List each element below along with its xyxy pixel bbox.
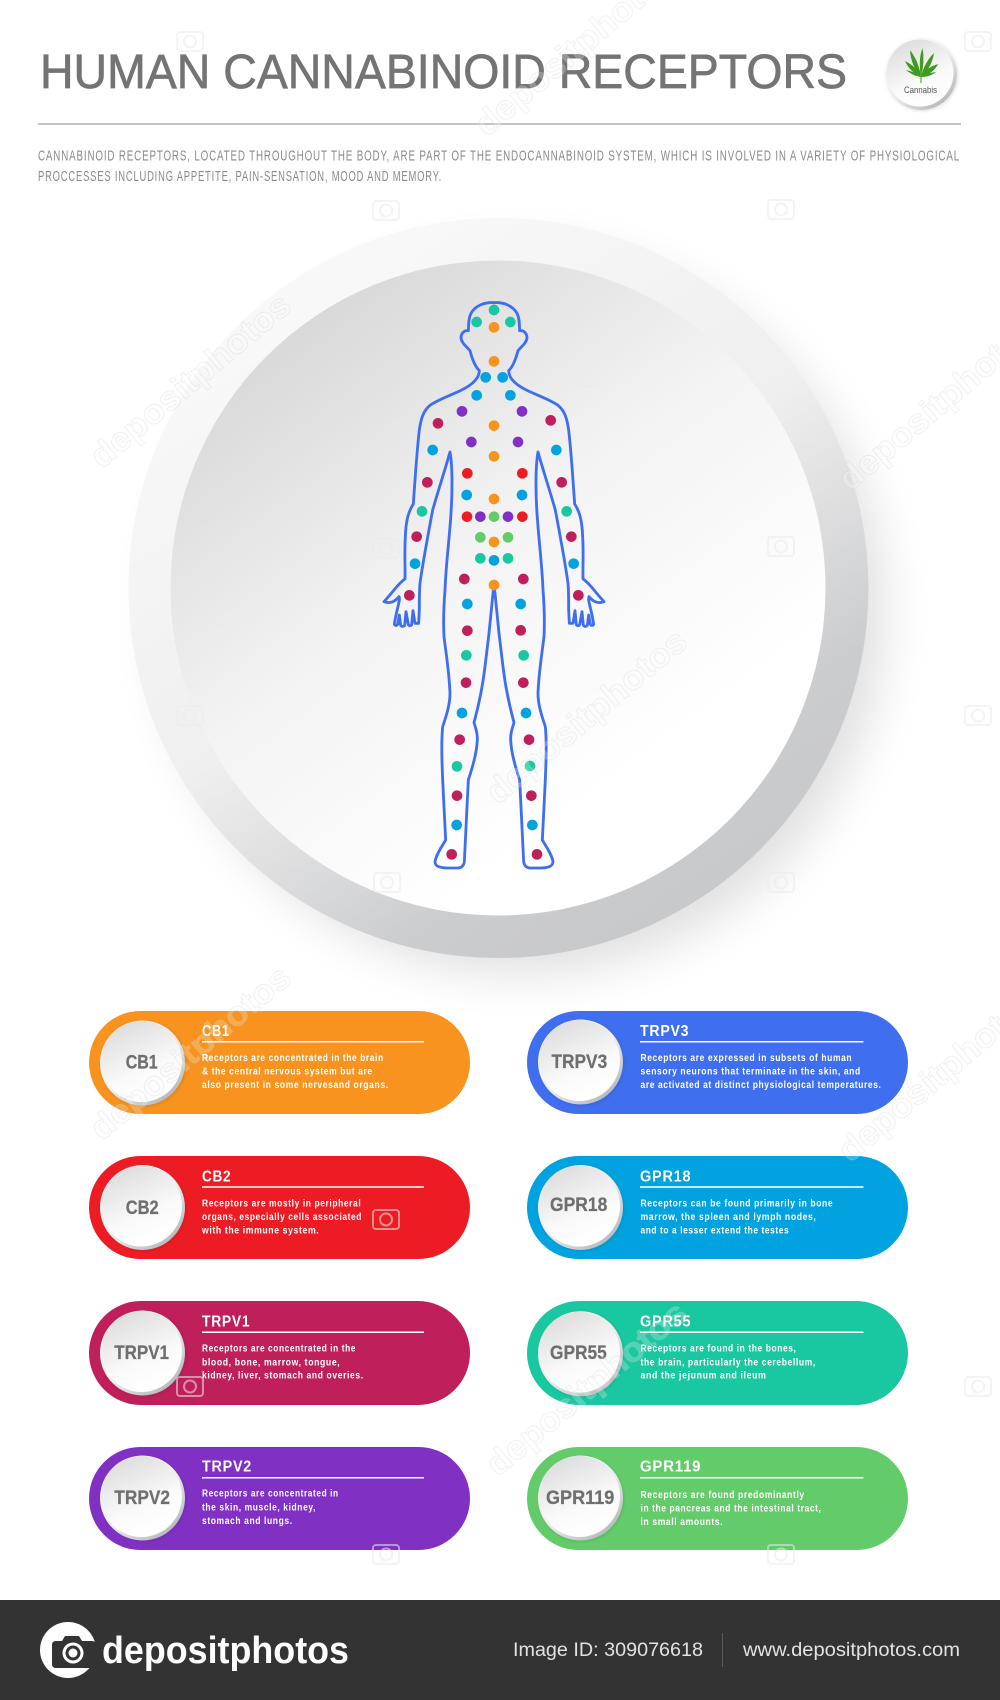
- GPR18 badge: GPR18: [550, 1195, 607, 1216]
- CB1 description: [202, 1053, 389, 1091]
- TRPV2 badge: TRPV2: [114, 1488, 170, 1509]
- CB2 heading: CB2: [202, 1169, 231, 1186]
- image id: Image ID: 309076618: [513, 1640, 703, 1661]
- icon: cannabis leaf: [905, 48, 938, 83]
- CB1 badge: [100, 1020, 185, 1106]
- TRPV2 heading: TRPV2: [202, 1459, 252, 1476]
- TRPV2 description: Receptors are concentrated in: [202, 1489, 339, 1500]
- TRPV1 badge: TRPV1: [114, 1343, 169, 1364]
- CB1 heading: CB1: [202, 1023, 230, 1040]
- GPR18 description: and to a lesser extend the testes: [640, 1226, 789, 1237]
- receptor dots: GPR119: [475, 511, 513, 543]
- GPR55 badge: GPR55: [550, 1343, 607, 1364]
- text: depositphotos: [83, 958, 299, 1148]
- GPR55 description: Receptors are found in the bones,: [640, 1344, 796, 1355]
- inner disc: [170, 260, 826, 916]
- icon: depositphotos camera logo: [40, 1622, 96, 1678]
- GPR119 description: in the pancreas and the intestinal tract,: [640, 1504, 822, 1515]
- receptor dots: CB1: [489, 322, 499, 590]
- GPR18 badge: [538, 1165, 623, 1250]
- GPR18 heading: GPR18: [640, 1169, 691, 1186]
- receptor dots: TRPV2: [457, 406, 527, 522]
- intro text: [38, 148, 960, 185]
- receptor dots: CB2: [462, 468, 528, 522]
- TRPV1 description: kidney, liver, stomach and overies.: [202, 1371, 364, 1382]
- receptor dots: GPR18: [410, 372, 579, 830]
- TRPV3 badge: TRPV3: [552, 1052, 607, 1073]
- GPR119 description: Receptors are found predominantly: [640, 1490, 805, 1501]
- text: depositphotos: [479, 1294, 695, 1484]
- TRPV1 badge: [100, 1310, 185, 1396]
- badge label: Cannabis: [904, 85, 937, 96]
- receptor dots: TRPV1: [404, 415, 584, 860]
- body outline: [384, 303, 604, 868]
- TRPV2 badge: [100, 1456, 185, 1540]
- footer bar: [0, 1600, 1000, 1700]
- intro text: PROCCESSES INCLUDING APPETITE, PAIN-SENSATION, MOOD AND MEMORY.: [38, 168, 442, 185]
- icon: cannabis badge: [885, 38, 957, 110]
- GPR119 badge: [538, 1456, 623, 1540]
- TRPV3 heading: TRPV3: [640, 1023, 689, 1040]
- receptor dots: GPR55: [417, 305, 572, 772]
- TRPV3 description: are activated at distinct physiological temperatures.: [640, 1080, 882, 1091]
- TRPV3 badge: [538, 1020, 623, 1104]
- body diagram: [384, 303, 604, 868]
- TRPV2 description: the skin, muscle, kidney,: [202, 1502, 316, 1513]
- TRPV2 description: stomach and lungs.: [202, 1516, 293, 1527]
- CB2 description: [201, 1199, 362, 1237]
- card: TRPV2: [89, 1447, 470, 1550]
- CB2 description: Receptors are mostly in peripheral: [202, 1199, 361, 1210]
- CB1 badge: CB1: [126, 1052, 158, 1073]
- GPR119 description: in small amounts.: [640, 1517, 723, 1528]
- TRPV3 description: Receptors are expressed in subsets of human: [640, 1053, 852, 1064]
- TRPV1 description: [202, 1344, 364, 1382]
- GPR55 description: [640, 1344, 816, 1382]
- CB1 description: & the central nervous system but are: [202, 1067, 373, 1078]
- CB2 badge: CB2: [126, 1198, 159, 1219]
- CB2 description: organs, especially cells associated: [202, 1212, 362, 1223]
- panel: body circle: [128, 218, 884, 974]
- TRPV1 heading: TRPV1: [202, 1314, 250, 1331]
- card: CB1: [89, 1011, 470, 1114]
- card: TRPV1: [89, 1301, 470, 1405]
- CB2 badge: [100, 1165, 185, 1250]
- CB1 description: also present in some nervesand organs.: [202, 1080, 389, 1091]
- GPR55 description: the brain, particularly the cerebellum,: [640, 1357, 816, 1368]
- text: depositphotos: [479, 622, 695, 812]
- GPR55 badge: [538, 1311, 623, 1396]
- TRPV3 description: [640, 1053, 882, 1091]
- GPR55 description: and the jejunum and ileum: [640, 1371, 766, 1382]
- footer url: www.depositphotos.com: [742, 1640, 960, 1661]
- title: HUMAN CANNABINOID RECEPTORS: [40, 46, 847, 99]
- GPR119 description: [640, 1490, 822, 1528]
- card: GPR119: [527, 1447, 908, 1550]
- card: GPR18: [527, 1156, 908, 1259]
- card: GPR55: [527, 1301, 908, 1405]
- TRPV3 description: sensory neurons that terminate in the skin, and: [640, 1067, 861, 1078]
- GPR55 heading: GPR55: [640, 1314, 691, 1331]
- text: depositphotos: [83, 286, 299, 476]
- TRPV2 description: [202, 1489, 339, 1527]
- GPR119 heading: GPR119: [640, 1459, 701, 1476]
- card: CB2: [89, 1156, 470, 1259]
- CB1 description: Receptors are concentrated in the brain: [202, 1053, 384, 1064]
- GPR18 description: marrow, the spleen and lymph nodes,: [640, 1212, 816, 1223]
- card: TRPV3: [527, 1011, 908, 1114]
- GPR18 description: Receptors can be found primarily in bone: [640, 1199, 833, 1210]
- GPR18 description: [640, 1199, 833, 1237]
- GPR119 badge: GPR119: [546, 1488, 614, 1509]
- TRPV1 description: Receptors are concentrated in the: [202, 1344, 356, 1355]
- outer ring: [128, 218, 868, 958]
- footer logotype: depositphotos: [102, 1630, 349, 1672]
- TRPV1 description: blood, bone, marrow, tongue,: [202, 1357, 340, 1368]
- CB2 description: with the immune system.: [201, 1226, 319, 1237]
